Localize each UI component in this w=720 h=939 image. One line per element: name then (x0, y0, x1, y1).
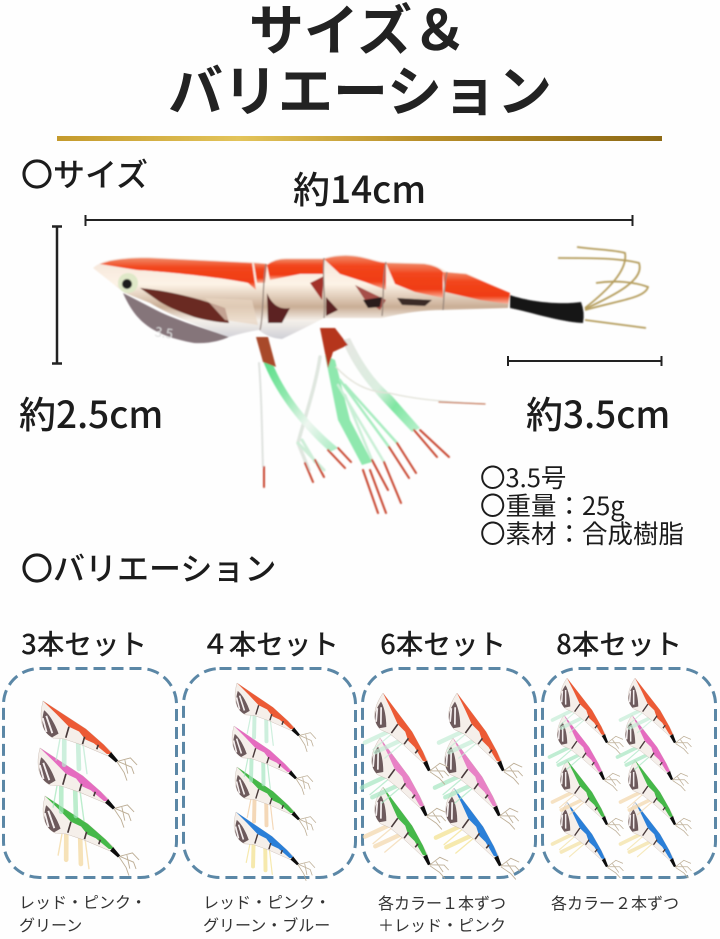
panel: 4 piece set: グリーン・ブルー (203, 912, 330, 936)
body height label: 約2.5cm (19, 385, 163, 439)
panel: 6 piece set: 6本セット (380, 622, 506, 662)
sinker (123, 293, 229, 343)
title (168, 0, 552, 127)
mirror reflections (140, 276, 432, 325)
dimension line: total length (85, 215, 633, 226)
panel: 8 piece set: 8本セット (556, 622, 682, 662)
eye (118, 273, 138, 293)
specifications: 〇素材：合成樹脂 (480, 514, 684, 551)
total length label: 約14cm (293, 160, 426, 214)
segment lines (260, 258, 447, 330)
heading: size: 〇サイズ (21, 150, 148, 196)
panel: 8 piece set (535, 622, 716, 914)
specifications: 〇重量：25g (480, 486, 625, 523)
panel: 4 piece set: レッド・ピンク・ (203, 889, 331, 913)
panel: 4 piece set: ４本セット (201, 622, 339, 662)
panel: 4 piece set (184, 622, 356, 936)
specifications: 〇3.5号 (480, 458, 566, 495)
panel: 6 piece set: ＋レッド・ピンク (378, 912, 506, 936)
sinker marking: 3.5 (154, 321, 174, 343)
panel: 3 piece set (4, 622, 176, 936)
body chrome (93, 255, 510, 339)
hooks (558, 247, 648, 328)
dimension line: tail length (508, 356, 662, 366)
main shrimp lure photo (93, 247, 648, 513)
title: バリエーション (168, 47, 552, 127)
legs and feelers (256, 328, 485, 513)
panel: 3 piece set: レッド・ピンク・ (19, 889, 147, 913)
red back (100, 256, 510, 304)
heading: variation: 〇バリエーション (21, 544, 276, 590)
dimension line: body height (52, 226, 62, 364)
panel: 6 piece set (345, 622, 536, 936)
specifications (480, 458, 684, 551)
tail length label: 約3.5cm (526, 385, 670, 439)
tail (510, 295, 584, 323)
panel: 3 piece set: グリーン (19, 912, 82, 936)
panel: 3 piece set: 3本セット (21, 622, 147, 662)
panel: 8 piece set: 各カラー２本ずつ (551, 890, 679, 914)
gold divider bar (57, 136, 662, 141)
panel: 6 piece set: 各カラー１本ずつ (378, 890, 506, 914)
